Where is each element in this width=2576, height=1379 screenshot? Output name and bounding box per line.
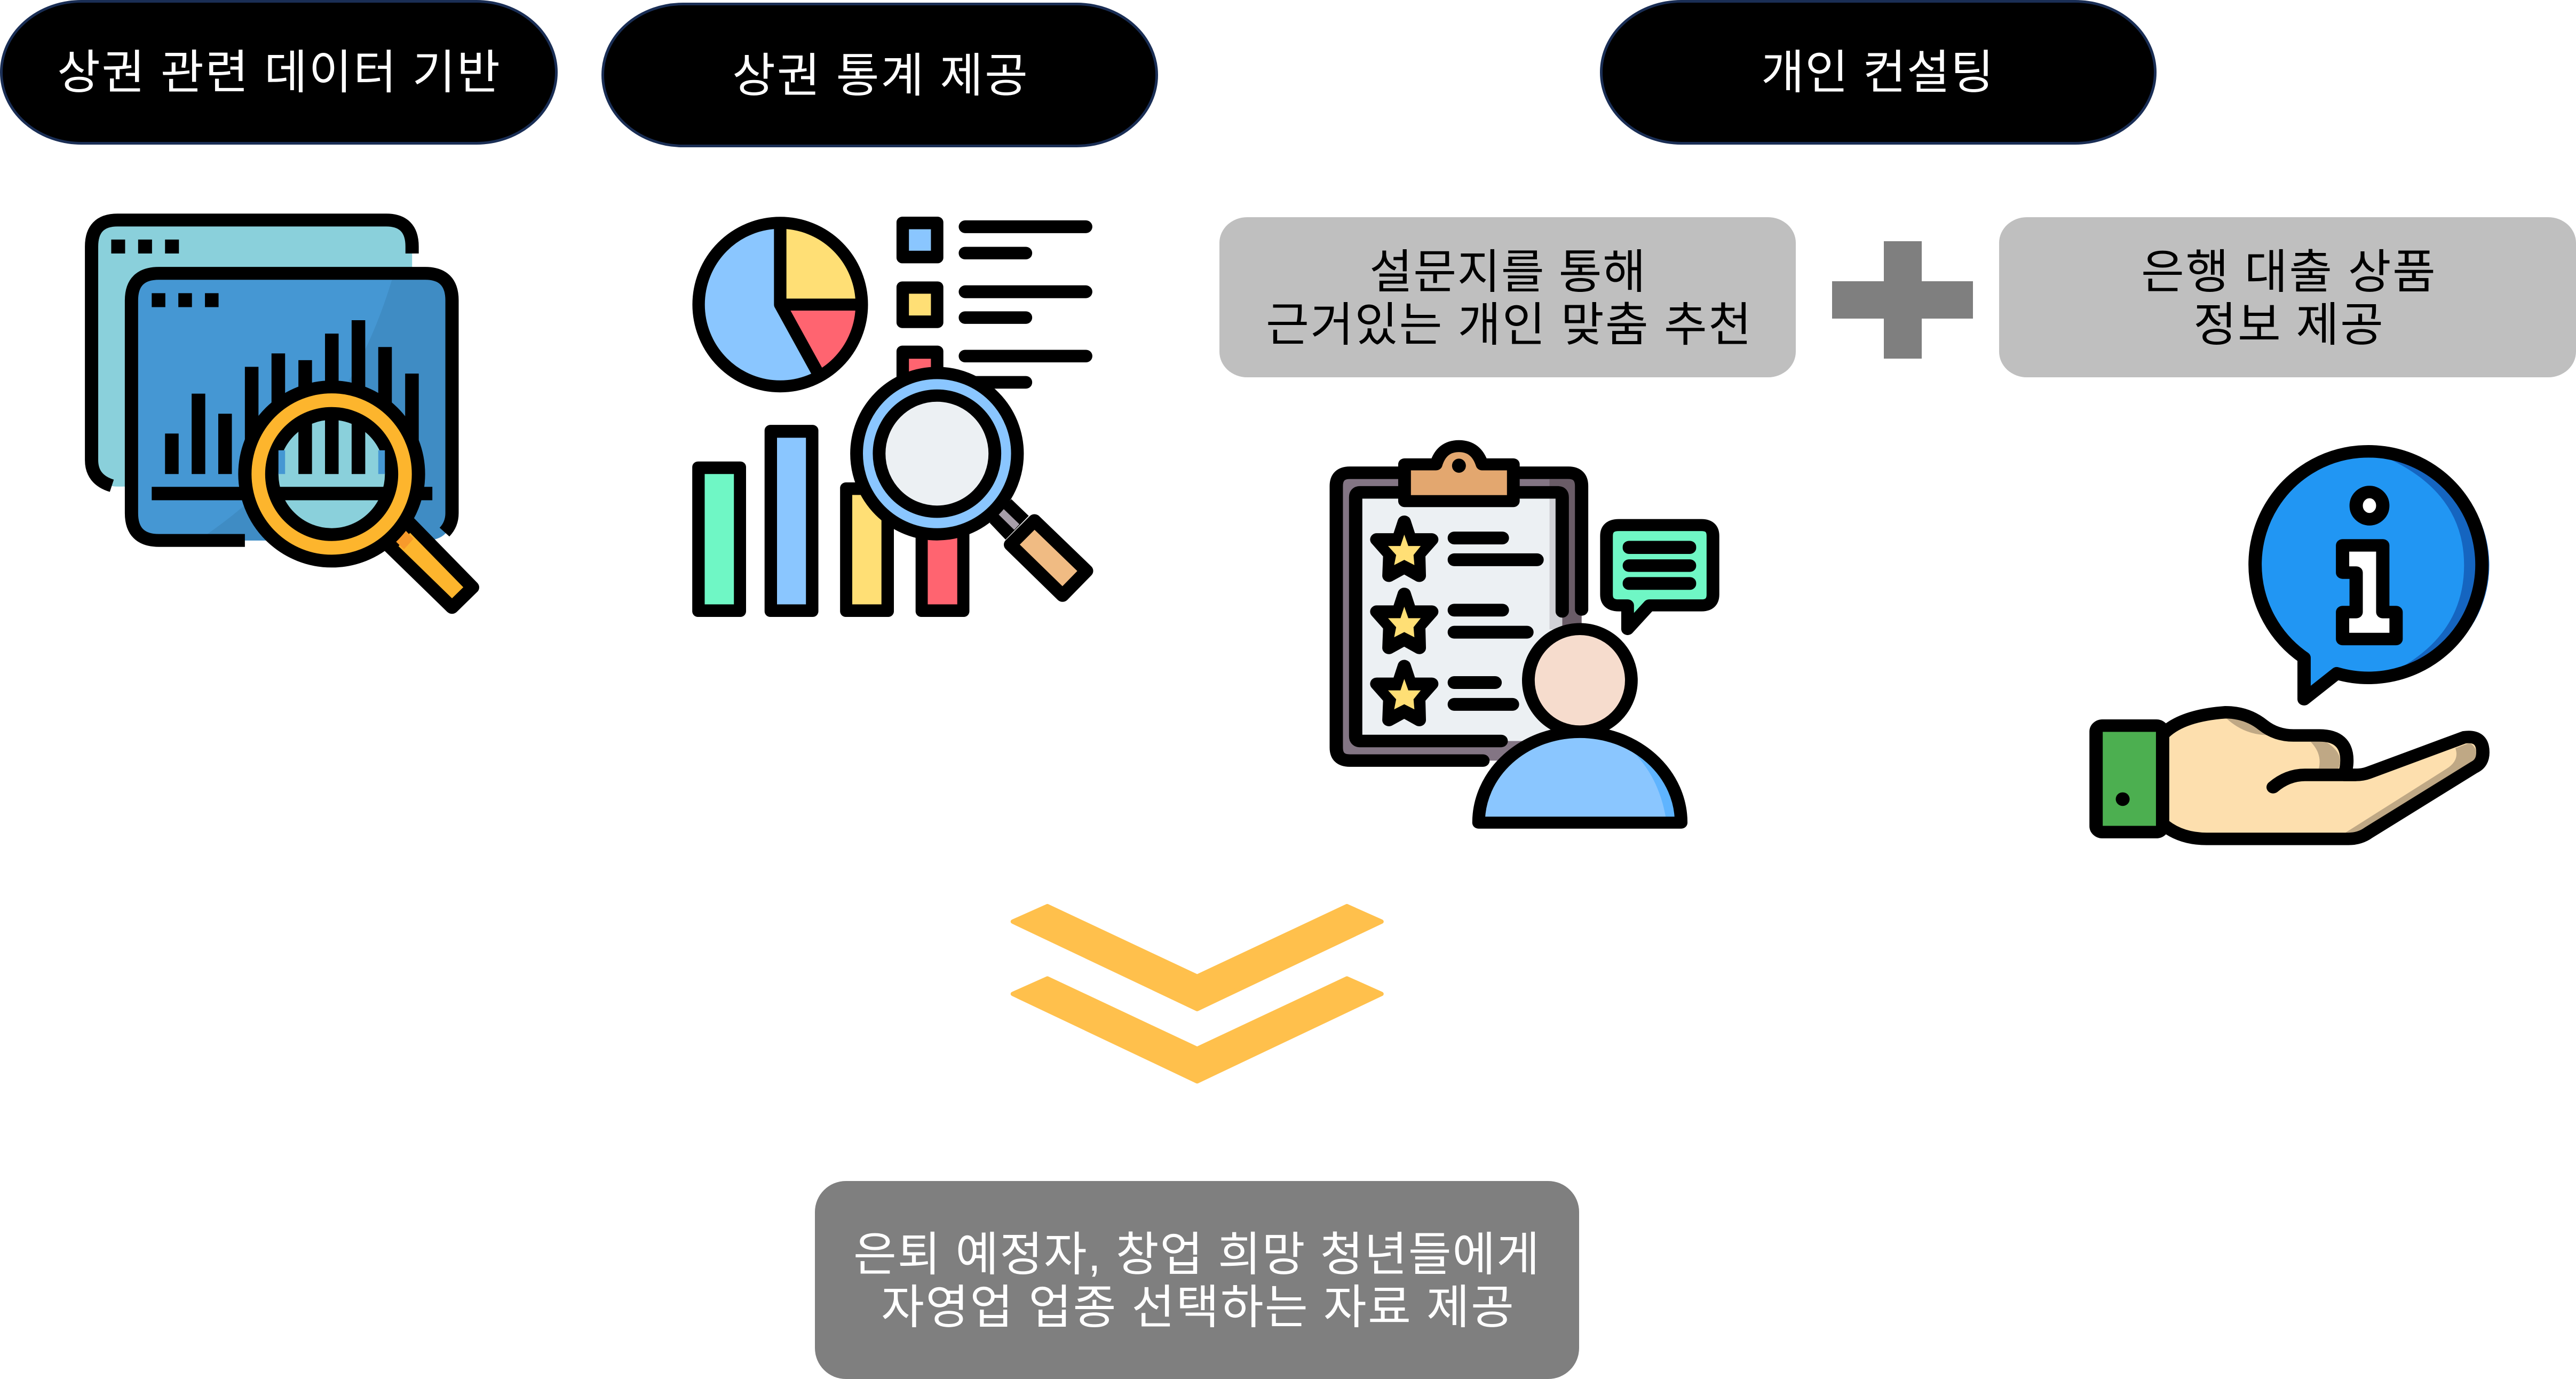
icon: survey clipboard with person bbox=[1336, 446, 1713, 823]
star rating 1 bbox=[1377, 522, 1432, 576]
panel: 은퇴 예정자 및 청년 대상 자영업 자료: 은퇴 예정자, 창업 희망 청년들에게 bbox=[853, 1228, 1540, 1281]
pill: 개인 컨설팅: 개인 컨설팅 bbox=[1761, 46, 1994, 99]
panel: 은행 대출 상품 정보 제공: 정보 제공 bbox=[2193, 298, 2383, 351]
panel: 설문지 개인 맞춤 추천: 근거있는 개인 맞춤 추천 bbox=[1266, 298, 1751, 351]
panel: 은퇴 예정자 및 청년 대상 자영업 자료 bbox=[815, 1181, 1579, 1379]
panel: 은행 대출 상품 정보 제공: 은행 대출 상품 bbox=[2141, 245, 2436, 298]
pill: 상권 통계 제공 bbox=[603, 4, 1157, 146]
arrow: double downward chevron bbox=[1013, 906, 1381, 1081]
panel: 은퇴 예정자 및 청년 대상 자영업 자료: 자영업 업종 선택하는 자료 제공 bbox=[881, 1281, 1514, 1334]
icon: data windows with magnifier bbox=[91, 220, 473, 607]
icon: pie chart and bar charts with magnifier bbox=[692, 217, 1092, 617]
panel: 설문지 개인 맞춤 추천: 설문지를 통해 bbox=[1369, 245, 1646, 298]
icon: plus sign bbox=[1832, 241, 1973, 359]
star rating 3 bbox=[1377, 666, 1432, 720]
panel: 설문지 개인 맞춤 추천 bbox=[1219, 217, 1796, 377]
panel: 은행 대출 상품 정보 제공 bbox=[1999, 217, 2576, 377]
icon: hand with info speech bubble bbox=[2096, 451, 2489, 839]
pill: 상권 통계 제공: 상권 통계 제공 bbox=[732, 49, 1028, 102]
pill: 상권 관련 데이터 기반 bbox=[1, 1, 556, 143]
pill: 개인 컨설팅 bbox=[1601, 1, 2155, 143]
star rating 2 bbox=[1377, 594, 1432, 648]
pill: 상권 관련 데이터 기반: 상권 관련 데이터 기반 bbox=[57, 46, 500, 99]
